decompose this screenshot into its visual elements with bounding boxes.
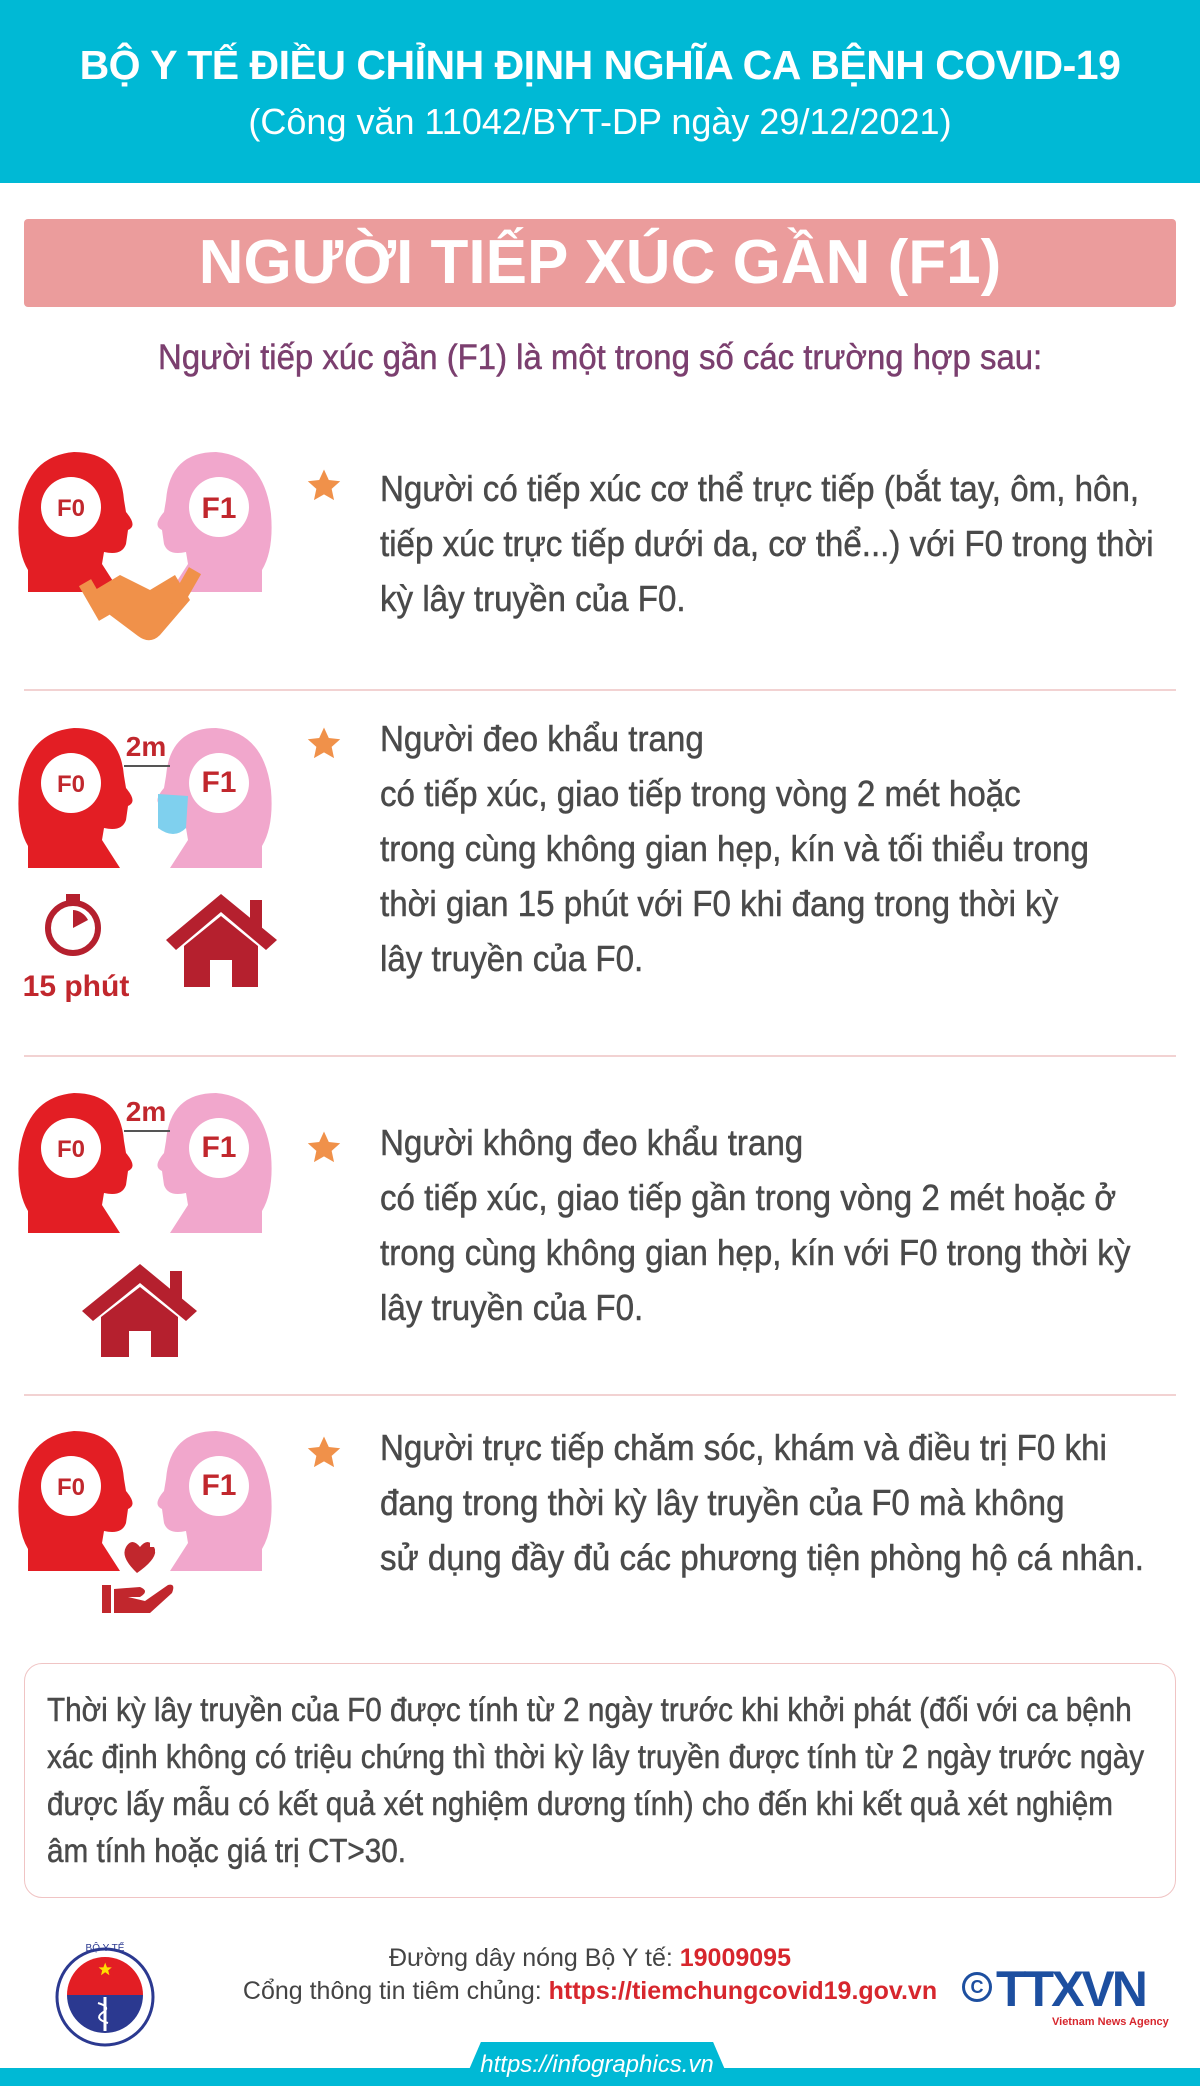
- icon: F0 head: F0: [57, 1136, 85, 1163]
- icon: F0 head: F0: [57, 1474, 85, 1501]
- text 1: tiếp xúc trực tiếp dưới da, cơ thể...) với F0 trong thời: [380, 523, 1154, 564]
- note text: âm tính hoặc giá trị CT>30.: [47, 1832, 406, 1869]
- title: BỘ Y TẾ ĐIỀU CHỈNH ĐỊNH NGHĨA CA BỆNH COVID-19: [80, 42, 1120, 88]
- icon: F0 head: [18, 452, 133, 592]
- section 3 icons: F1: [201, 1131, 237, 1164]
- icon: F0 head: F0: [57, 771, 85, 798]
- distance 2m: [124, 1130, 170, 1132]
- text 3: lây truyền của F0.: [380, 1287, 643, 1328]
- text 2: lây truyền của F0.: [380, 938, 643, 979]
- icon: handshake: [79, 567, 201, 640]
- label 15 phut: 15 phút: [23, 970, 129, 1003]
- text 4: [380, 1427, 1144, 1578]
- icon: F0 head: [18, 728, 133, 868]
- text 2: có tiếp xúc, giao tiếp trong vòng 2 mét hoặc: [380, 773, 1021, 814]
- icon: F0 head: F0: [57, 495, 85, 522]
- logo: ministry of health: BỘ Y TẾ: [86, 1941, 125, 1954]
- section 1 icons: F1: [201, 492, 237, 525]
- footer tab with url: https://infographics.vn: [480, 2051, 714, 2078]
- icon: F0 head: [18, 1431, 133, 1571]
- logo: TTXVN: C: [970, 1977, 984, 1997]
- banner: [24, 219, 1176, 307]
- distance 2m: [124, 765, 170, 767]
- icon: F0 head: [18, 1093, 133, 1233]
- star 1: [308, 470, 340, 500]
- footer hotline text: [243, 1944, 937, 2005]
- section 2 icons: F1: [201, 766, 237, 799]
- note text: [47, 1691, 1144, 1870]
- text 1: kỳ lây truyền của F0.: [380, 578, 686, 619]
- star 2: [308, 728, 340, 758]
- text 4: sử dụng đầy đủ các phương tiện phòng hộ cá nhân.: [380, 1537, 1144, 1578]
- text 1: Người có tiếp xúc cơ thể trực tiếp (bắt tay, ôm, hôn,: [380, 468, 1139, 509]
- banner: NGƯỜI TIẾP XÚC GẦN (F1): [199, 228, 1001, 297]
- icon: F1 head: [157, 452, 272, 592]
- icon: F1 head: [157, 1093, 272, 1233]
- logo: TTXVN: TTXVN: [996, 1961, 1145, 2017]
- footer tab with url: [470, 2042, 724, 2077]
- star 4: [308, 1436, 340, 1467]
- footer hotline text: Cổng thông tin tiêm chủng: https://tiemchungcovid19.gov.vn: [243, 1977, 937, 2005]
- text 3: trong cùng không gian hẹp, kín với F0 trong thời kỳ: [380, 1232, 1130, 1273]
- icon: F1 head: [157, 1431, 272, 1571]
- icon: house: [166, 894, 277, 987]
- text 2: Người đeo khẩu trang: [380, 718, 704, 759]
- footer hotline text: Đường dây nóng Bộ Y tế: 19009095: [389, 1944, 791, 1972]
- text 1: [380, 468, 1154, 619]
- note text: Thời kỳ lây truyền của F0 được tính từ 2 ngày trước khi khởi phát (đối với ca bệnh: [47, 1691, 1132, 1728]
- section 2 icons: [18, 728, 277, 1003]
- text 4: Người trực tiếp chăm sóc, khám và điều trị F0 khi: [380, 1427, 1107, 1468]
- icon: house: [82, 1264, 197, 1357]
- section 4 icons: F1: [201, 1469, 237, 1502]
- text 3: có tiếp xúc, giao tiếp gần trong vòng 2 mét hoặc ở: [380, 1177, 1116, 1218]
- text 4: đang trong thời kỳ lây truyền của F0 mà không: [380, 1482, 1064, 1523]
- text 3: [380, 1122, 1131, 1328]
- text 2: trong cùng không gian hẹp, kín và tối thiểu trong: [380, 828, 1089, 869]
- section 3 icons: [18, 1093, 272, 1357]
- icon: stopwatch: [48, 894, 98, 953]
- note text: được lấy mẫu có kết quả xét nghiệm dương tính) cho đến khi kết quả xét nghiệm: [47, 1785, 1113, 1822]
- section 2 icons: 2m: [126, 731, 166, 762]
- section 3 icons: 2m: [126, 1096, 166, 1127]
- text 2: thời gian 15 phút với F0 khi đang trong thời kỳ: [380, 883, 1058, 924]
- logo: TTXVN: [962, 1961, 1169, 2028]
- footer strip: [0, 2068, 1200, 2086]
- section 4 icons: [18, 1431, 272, 1613]
- icon: heart in hand: [102, 1538, 173, 1613]
- text 2: [380, 718, 1089, 979]
- note box: [24, 1663, 1176, 1898]
- section 1 icons: [18, 452, 272, 640]
- icon: F1 head with mask: [157, 728, 272, 868]
- text 3: Người không đeo khẩu trang: [380, 1122, 803, 1163]
- logo: TTXVN: Vietnam News Agency: [1052, 2016, 1169, 2028]
- subtitle: (Công văn 11042/BYT-DP ngày 29/12/2021): [248, 101, 952, 142]
- logo: ministry of health: [56, 1941, 154, 2046]
- star 3: [308, 1132, 340, 1162]
- header: [0, 0, 1200, 183]
- intro text: Người tiếp xúc gần (F1) là một trong số các trường hợp sau:: [158, 338, 1042, 377]
- note text: xác định không có triệu chứng thì thời kỳ lây truyền được tính từ 2 ngày trước ngày: [47, 1738, 1144, 1775]
